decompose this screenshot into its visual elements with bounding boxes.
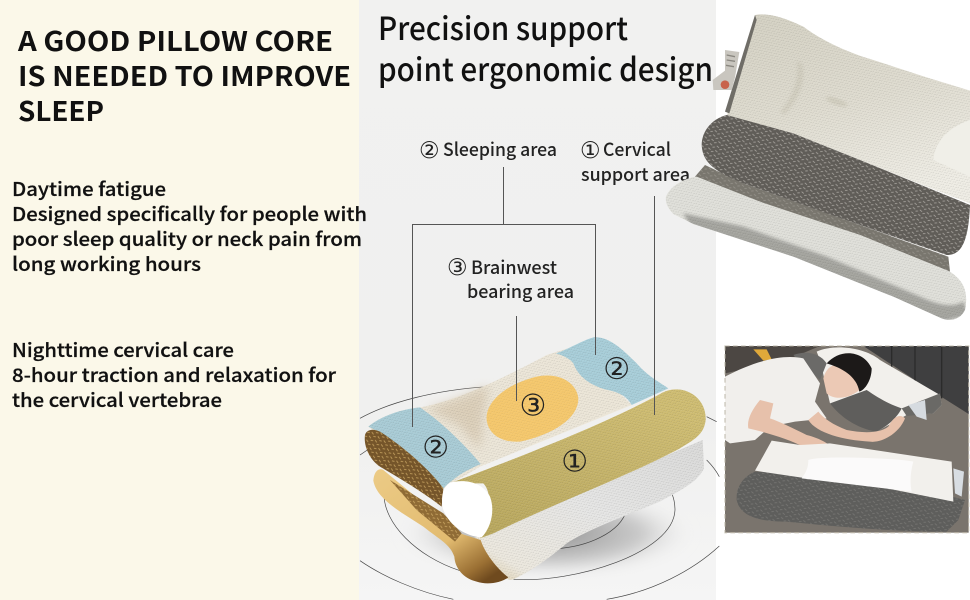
label: sleeping area: ② bbox=[419, 138, 440, 164]
zone markers bbox=[422, 352, 630, 480]
text block: daytime fatigue: Designed specifically for people with bbox=[12, 200, 367, 227]
mattress background bbox=[725, 346, 969, 533]
text block: daytime fatigue: Daytime fatigue bbox=[12, 175, 166, 202]
gray bolster bbox=[702, 115, 970, 255]
text block: nighttime cervical care bbox=[12, 336, 336, 413]
label: cervical support area: Cervical bbox=[603, 136, 671, 162]
label: cervical support area bbox=[580, 136, 690, 187]
zone 1 cervical bolster bbox=[442, 389, 706, 538]
heading: good pillow core: SLEEP bbox=[18, 90, 104, 129]
lower layer: gold edge and white underside bbox=[373, 440, 704, 583]
care tag bbox=[713, 50, 739, 90]
title: precision support: Precision support bbox=[378, 4, 628, 50]
zone markers: ③ bbox=[520, 389, 546, 424]
text block: nighttime cervical care: Nighttime cervical care bbox=[12, 336, 234, 363]
photo: grey and white pillow product shot bbox=[666, 14, 970, 322]
zone markers: ② bbox=[422, 430, 449, 465]
label: brainwest bearing area: ③ bbox=[447, 255, 468, 281]
photo edge bbox=[725, 346, 969, 533]
heading: good pillow core: A GOOD PILLOW CORE bbox=[17, 20, 333, 59]
label: brainwest bearing area: Brainwest bbox=[471, 254, 557, 280]
label: brainwest bearing area: bearing area bbox=[467, 278, 574, 304]
illustration: ergonomic pillow diagram bbox=[360, 337, 719, 599]
headboard bbox=[863, 346, 969, 414]
photo: woman sleeping on pillow bbox=[725, 346, 969, 533]
heading: good pillow core bbox=[17, 20, 351, 129]
pale top pillow bbox=[725, 14, 970, 203]
heading: good pillow core: IS NEEDED TO IMPROVE bbox=[18, 55, 351, 94]
lower pale bolster bbox=[666, 177, 968, 322]
text block: nighttime cervical care: the cervical vertebrae bbox=[12, 386, 222, 413]
title: precision support: point ergonomic design bbox=[378, 45, 713, 91]
woman bbox=[725, 353, 905, 458]
label: cervical support area: support area bbox=[581, 161, 690, 187]
back pillow bbox=[793, 347, 942, 432]
text block: daytime fatigue bbox=[12, 175, 367, 277]
top surface with zones bbox=[365, 337, 668, 507]
label: brainwest bearing area bbox=[447, 254, 574, 304]
label: sleeping area: Sleeping area bbox=[443, 136, 557, 162]
zone markers: ① bbox=[561, 445, 588, 480]
panel: left cream background bbox=[0, 0, 359, 600]
title: precision support bbox=[378, 4, 713, 91]
text block: daytime fatigue: long working hours bbox=[12, 250, 201, 277]
text block: daytime fatigue: poor sleep quality or neck pain from bbox=[12, 225, 362, 252]
text block: nighttime cervical care: 8-hour traction and relaxation for bbox=[12, 361, 336, 388]
zone markers: ② bbox=[603, 352, 630, 387]
panel: centre grey background bbox=[359, 0, 716, 600]
front pillow bbox=[737, 441, 965, 532]
lower gray layer bbox=[695, 165, 950, 272]
label: cervical support area: ① bbox=[580, 138, 601, 164]
callout lines bbox=[412, 167, 654, 427]
zone 3 orange centre bbox=[487, 375, 578, 442]
